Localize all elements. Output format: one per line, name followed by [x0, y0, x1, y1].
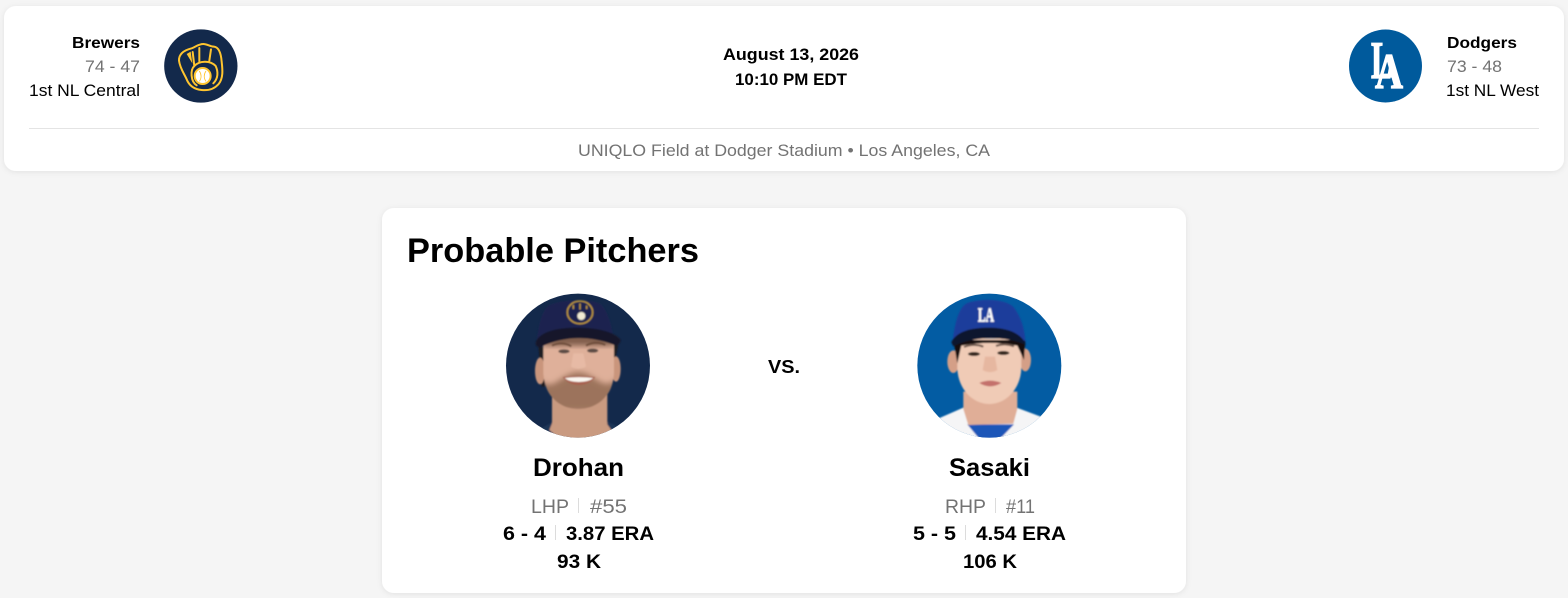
away team: Brewers info — [29, 35, 140, 100]
icon: Dodgers logo — [1349, 30, 1422, 102]
icon: Dodgers logo: A — [1375, 43, 1403, 99]
pitcher details: Drohan: 6 - 4 — [503, 524, 546, 545]
pitcher details: Drohan: 93 K — [557, 552, 601, 573]
away team: Brewers info: 74 - 47 — [85, 57, 140, 76]
panel: game header — [4, 6, 1564, 171]
pitcher details: Drohan: #55 — [590, 497, 627, 518]
pitcher details: Sasaki — [913, 454, 1066, 573]
pitcher details: Drohan — [503, 454, 654, 573]
game date and time — [723, 45, 859, 89]
icon: Brewers logo — [164, 29, 237, 103]
pitcher details: Sasaki: 106 K — [963, 552, 1017, 573]
versus label: VS. — [768, 356, 800, 377]
venue: UNIQLO Field at Dodger Stadium • Los Angeles, CA — [578, 141, 991, 160]
pitcher details: Sasaki: #11 — [1006, 497, 1035, 518]
heading: Probable Pitchers — [407, 232, 699, 270]
home team: Dodgers info: Dodgers — [1447, 35, 1517, 52]
game date and time: August 13, 2026 — [723, 45, 859, 64]
pitcher details: Sasaki: RHP — [945, 497, 986, 518]
pitcher details: Drohan: Drohan — [533, 454, 624, 482]
away team: Brewers info: 1st NL Central — [29, 81, 140, 100]
portrait: Sasaki: LA — [978, 305, 994, 327]
pitcher details: Sasaki: Sasaki — [949, 454, 1030, 482]
pitcher details: Sasaki: 5 - 5 — [913, 524, 956, 545]
icon: Dodgers logo: L — [1371, 32, 1392, 90]
game date and time: 10:10 PM EDT — [735, 70, 848, 89]
portrait: Sasaki — [917, 294, 1062, 438]
pitcher details: Drohan: LHP — [531, 497, 569, 518]
pitcher details: Drohan: 3.87 ERA — [566, 524, 654, 545]
home team: Dodgers info — [1446, 35, 1539, 100]
panel: probable pitchers — [382, 208, 1186, 593]
pitcher details: Sasaki: 4.54 ERA — [976, 524, 1066, 545]
portrait: Drohan — [506, 294, 650, 438]
home team: Dodgers info: 73 - 48 — [1447, 57, 1502, 76]
away team: Brewers info: Brewers — [72, 35, 140, 52]
home team: Dodgers info: 1st NL West — [1446, 81, 1539, 100]
